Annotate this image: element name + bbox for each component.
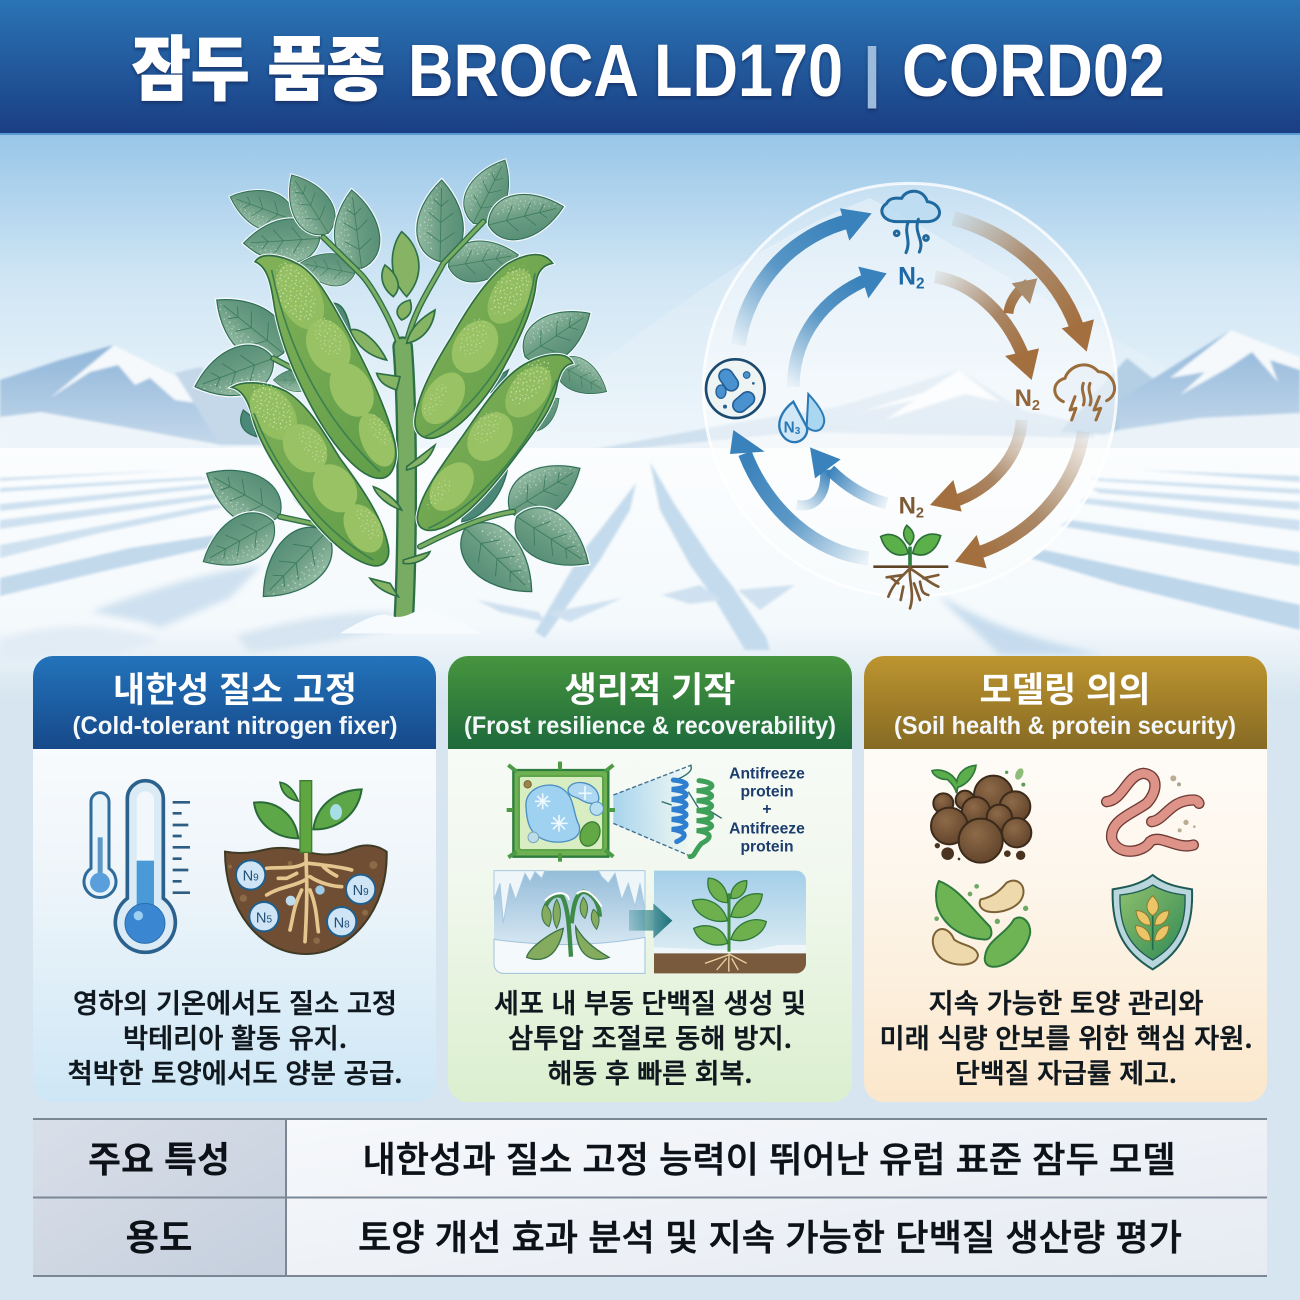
- row: use: 용도: [126, 1209, 192, 1261]
- panel body text: 단백질 자급률 제고.: [955, 1052, 1177, 1091]
- panel: frost resilience: [448, 656, 852, 1102]
- row: use: 토양 개선 효과 분석 및 지속 가능한 단백질 생산량 평가: [358, 1209, 1182, 1261]
- icon: wedge and protein: [613, 765, 722, 857]
- icon: plant in soil with N nodules: N9: [353, 883, 369, 899]
- panel heading: [864, 656, 1267, 749]
- icon: earthworms: [1107, 773, 1199, 851]
- panel heading: 모델링 의의: [980, 662, 1150, 713]
- label: antifreeze protein: +: [762, 801, 772, 818]
- panel body text: 척박한 토양에서도 양분 공급.: [68, 1052, 402, 1091]
- icon: water droplets N3: [779, 394, 824, 442]
- icon: water droplets N3: N: [784, 420, 795, 437]
- row: key traits: 주요 특성: [88, 1131, 230, 1183]
- panel body text: 해동 후 빠른 회복.: [548, 1052, 752, 1091]
- leaves: [187, 151, 615, 615]
- label: N2 blue: N: [898, 263, 916, 290]
- panel body text: [880, 982, 1252, 1091]
- icon: plant in soil with N nodules: N9: [243, 869, 259, 885]
- panel heading: [448, 656, 852, 749]
- arrow: blue branch: [797, 470, 825, 505]
- arrow: brown branch upward: [1008, 278, 1037, 313]
- panel body text: 박테리아 활동 유지.: [123, 1017, 347, 1056]
- icon: rain cloud: [882, 191, 940, 253]
- icon: shield with wheat: [1113, 875, 1192, 969]
- label: N2 brown bottom: N: [899, 492, 916, 519]
- row: key traits: 내한성과 질소 고정 능력이 뛰어난 유럽 표준 잠두 모델: [362, 1131, 1176, 1183]
- arrow: inner blue up: [793, 267, 887, 387]
- title: BROCA LD170: [408, 29, 843, 112]
- dark leaves behind pods: [241, 326, 515, 525]
- icon: storm cloud: [1055, 365, 1115, 420]
- header band with title: [0, 0, 1300, 135]
- label: antifreeze protein: protein: [740, 839, 794, 856]
- label: N2 brown right: N: [1015, 385, 1032, 412]
- panel body text: [68, 982, 402, 1091]
- panel body text: [494, 982, 806, 1091]
- panel heading: [33, 656, 436, 749]
- arrow: outer blue up left: [730, 430, 868, 558]
- icon: seedling with roots: [873, 525, 948, 608]
- arrow: inner brown down right: [935, 277, 1039, 380]
- icon: plant cell: [507, 762, 615, 862]
- label: N2 brown bottom: 2: [916, 505, 924, 521]
- label: N2 blue: 2: [916, 275, 925, 292]
- panel heading: (Cold-tolerant nitrogen fixer): [72, 712, 398, 740]
- title: CORD02: [902, 29, 1165, 112]
- arrow: outer brown down right: [953, 218, 1094, 352]
- panel body text: 삼투압 조절로 동해 방지.: [508, 1017, 792, 1056]
- panel body text: 미래 식량 안보를 위한 핵심 자원.: [880, 1017, 1252, 1056]
- panel: cold-tolerant nitrogen fixer: [33, 656, 436, 1102]
- diagram: nitrogen cycle circle: [703, 183, 1117, 608]
- label: antifreeze protein: [729, 765, 805, 856]
- pods: [232, 255, 573, 566]
- stem and branches: [273, 222, 513, 615]
- panel body text: 지속 가능한 토양 관리와: [928, 982, 1204, 1021]
- arrow: outer blue up: [738, 208, 872, 345]
- panel heading: 내한성 질소 고정: [113, 662, 357, 713]
- icons: thermometers and soil: [84, 781, 387, 954]
- arrow: inner blue up left: [810, 447, 887, 503]
- label: N2 brown right: 2: [1032, 398, 1040, 414]
- icon: plant in soil with N nodules: N5: [256, 910, 273, 926]
- panel body text: 세포 내 부동 단백질 생성 및: [494, 982, 806, 1021]
- icon: recovered plant: [654, 871, 806, 973]
- label: antifreeze protein: protein: [740, 784, 794, 801]
- panel body text: 영하의 기온에서도 질소 고정: [73, 982, 397, 1021]
- arrow: outer brown down left: [955, 432, 1083, 568]
- icon: small thermometer: [84, 793, 116, 898]
- label: antifreeze protein: Antifreeze: [729, 820, 805, 837]
- icon: plant in soil with N nodules: N8: [334, 915, 350, 931]
- icon: water droplets N3: 3: [795, 426, 801, 437]
- buds: [333, 232, 435, 597]
- icon: frozen wilted plant: [494, 871, 645, 973]
- plant: frost-covered faba bean with pods: [187, 151, 615, 633]
- label: antifreeze protein: Antifreeze: [729, 765, 805, 782]
- arrow: inner brown down left: [930, 420, 1022, 512]
- icons: cell and recovery: [494, 762, 806, 973]
- table: key traits and use: [33, 1119, 1267, 1276]
- icon: soil clods: [931, 765, 1031, 863]
- icon: microbe circle: [706, 359, 765, 418]
- icons: soil, worm, beans, shield: [931, 765, 1199, 969]
- snow mound at base: [340, 607, 480, 633]
- title: |: [863, 34, 881, 110]
- panel heading: (Frost resilience & recoverability): [464, 712, 836, 740]
- icon: plant in soil with N nodules: [225, 781, 387, 954]
- arrow: freeze to recovery: [629, 903, 672, 938]
- icon: beans and pods: [933, 881, 1030, 967]
- title: 잠두 품종: [132, 14, 385, 115]
- panel heading: 생리적 기작: [564, 662, 736, 713]
- panel: modelling significance: [864, 656, 1267, 1102]
- panel heading: (Soil health & protein security): [894, 712, 1236, 740]
- icon: large thermometer: [115, 781, 190, 952]
- title: [132, 14, 1165, 115]
